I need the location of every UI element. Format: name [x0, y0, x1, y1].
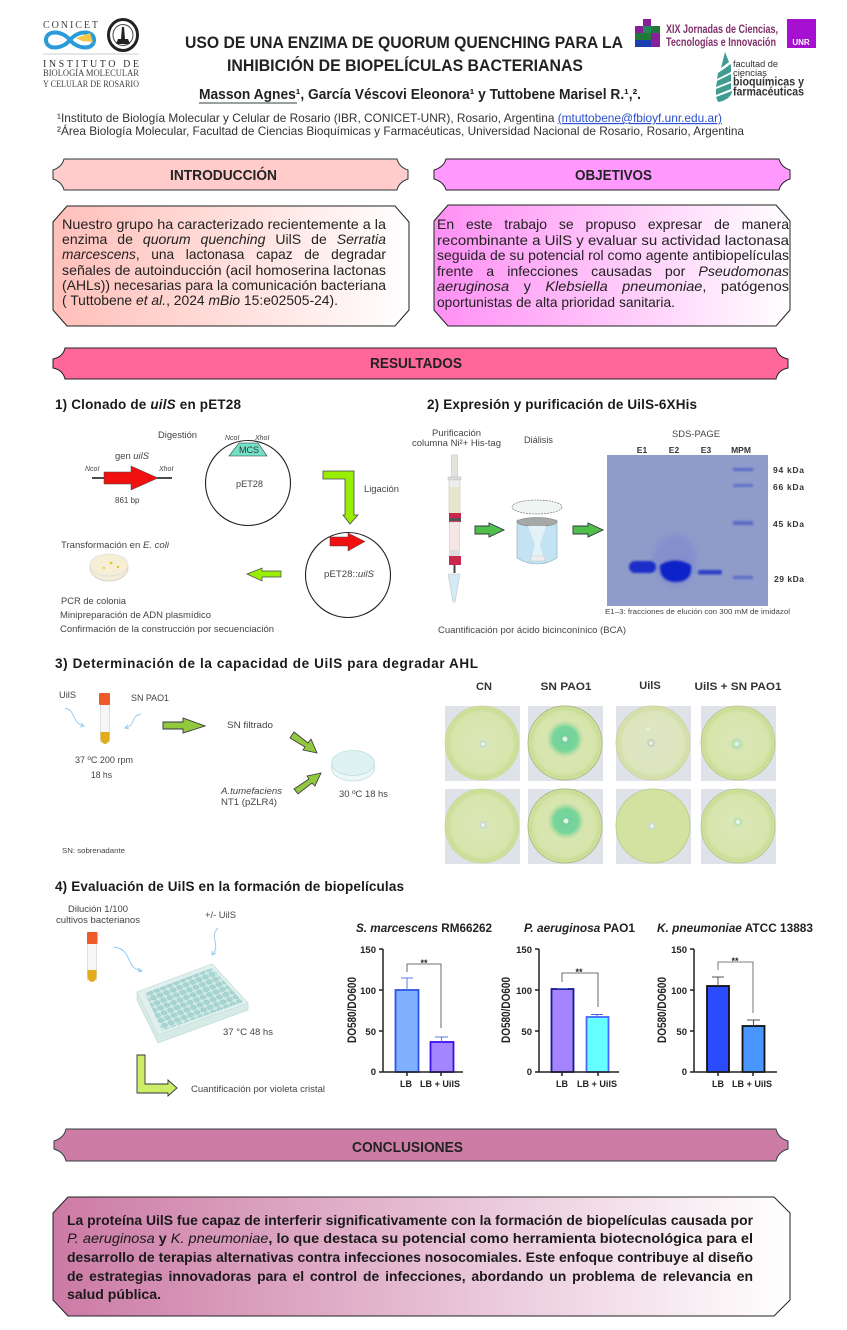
arrow: to gel	[573, 523, 603, 537]
panel: objetivos: oportunistas de alta prioridad sanitaria.	[437, 294, 675, 310]
arrow: ligación	[323, 471, 358, 524]
icon: syringe column	[448, 455, 461, 602]
logo: Facultad de Ciencias Bioquímicas y Farmacéuticas: facultad de	[733, 59, 778, 69]
bar chart: K. pneumoniae: 100	[671, 986, 687, 997]
label: violeta cristal: Cuantificación por violeta cristal	[191, 1084, 325, 1094]
logo: CONICET and Instituto de Biología Molecular: Y CELULAR DE ROSARIO	[43, 79, 139, 89]
gel lane labels: MPM	[731, 445, 751, 455]
heading: Resultados	[53, 348, 788, 379]
bar chart: K. pneumoniae	[657, 921, 813, 1089]
bar chart: K. pneumoniae: K. pneumoniae ATCC 13883	[657, 921, 813, 935]
text: BCA quantification: Cuantificación por ácido bicinconínico (BCA)	[438, 625, 626, 635]
logo: XIX Jornadas and UNR: Tecnologías e Innovación	[666, 37, 776, 49]
authors: Masson Agnes¹, García Véscovi Eleonora¹ y Tuttobene Marisel R.¹,².	[199, 87, 641, 103]
text: incubation: 37 ºC 200 rpm	[75, 755, 133, 765]
title	[185, 34, 623, 75]
heading: Conclusiones	[54, 1129, 788, 1161]
arrow: to filtrate	[163, 718, 205, 733]
gel molecular weight labels	[773, 465, 804, 584]
bar chart: K. pneumoniae: 50	[676, 1027, 687, 1038]
gel lane labels	[637, 445, 751, 455]
plate column headers	[476, 680, 782, 693]
panel: conclusiones: P. aeruginosa y K. pneumoniae, lo que destaca su potencial como herramienta biotecnológica para el	[67, 1230, 753, 1246]
icon: culture tube	[99, 693, 110, 744]
gel lane labels: E2	[669, 445, 679, 455]
arrow: transformation	[247, 568, 281, 581]
plasmid pET28::uilS: pET28::uilS	[324, 569, 375, 579]
section 4: biopelículas	[55, 879, 813, 1096]
logo: CONICET and Instituto de Biología Molecular: INSTITUTO DE	[43, 59, 139, 70]
bar chart: K. pneumoniae: DO580/DO600	[657, 977, 669, 1043]
logo: Facultad de Ciencias Bioquímicas y Farmacéuticas	[716, 52, 805, 102]
arrow: to dialysis	[475, 523, 504, 537]
label: diálisis: Diálisis	[524, 435, 553, 445]
gel molecular weight labels: 94 kDa	[773, 465, 804, 475]
arrow: quantification	[137, 1055, 177, 1096]
panel: conclusiones: salud pública.	[67, 1286, 161, 1302]
label: digestión: Digestión	[158, 430, 197, 440]
arrow: tube to plate	[114, 947, 142, 972]
heading: section 1: 1) Clonado de uilS en pET28	[55, 397, 241, 412]
heading: Objetivos	[434, 159, 790, 190]
icon: culture tube	[87, 932, 98, 982]
section 3: degradación de AHL	[55, 656, 782, 864]
bar chart: S. marcescens: 150	[360, 945, 376, 956]
panel: objetivos: En este trabajo se propuso expresar de manera	[437, 216, 789, 232]
section 1: clonado	[55, 397, 399, 634]
plasmid pET28	[206, 435, 290, 526]
logo: CONICET and Instituto de Biología Molecular: CONICET	[43, 20, 98, 31]
gel caption: E1–3: fracciones de elución con 300 mM de imidazol	[605, 607, 790, 616]
plasmid pET28: NcoI	[225, 435, 239, 442]
bar chart: K. pneumoniae: LB	[712, 1079, 724, 1089]
bar chart: P. aeruginosa: LB + UilS	[577, 1079, 617, 1089]
bar chart: S. marcescens: DO580/DO600	[347, 977, 359, 1043]
arrows: additions to tube	[65, 708, 141, 729]
plasmid pET28: MCS	[239, 445, 259, 456]
bar chart: K. pneumoniae: 0	[682, 1067, 687, 1078]
heading: Objetivos: OBJETIVOS	[575, 168, 652, 184]
plate column headers: SN PAO1	[540, 681, 592, 693]
bar chart: S. marcescens: S. marcescens RM66262	[356, 921, 492, 935]
logo: Facultad de Ciencias Bioquímicas y Farmacéuticas: farmacéuticas	[733, 86, 804, 98]
text: incubation: 18 hs	[91, 770, 112, 780]
bar chart: K. pneumoniae: 150	[671, 945, 687, 956]
gel lane labels: E3	[701, 445, 711, 455]
logo: Facultad de Ciencias Bioquímicas y Farmacéuticas: ciencias	[733, 68, 768, 78]
gene uilS diagram: 861 bp	[115, 496, 140, 505]
SDS-PAGE gel	[607, 455, 768, 606]
bar chart: S. marcescens: LB + UilS	[420, 1079, 460, 1089]
gene uilS diagram: NcoI	[85, 466, 99, 473]
gene uilS diagram: XhoI	[158, 466, 173, 473]
panel: objetivos: seguida de su potencial rol como agente antibiopelículas	[437, 247, 789, 263]
label: biosensor strain	[220, 786, 282, 807]
label: biosensor strain: NT1 (pZLR4)	[221, 797, 277, 807]
panel: introducción: enzima de quorum quenching UilS de Serratia	[62, 231, 386, 247]
bar chart: P. aeruginosa: 100	[516, 986, 532, 997]
plate column headers: CN	[476, 681, 492, 693]
label: ligación: Ligación	[364, 484, 399, 494]
label: transformación: Transformación en E. coli	[61, 540, 170, 550]
bar chart: P. aeruginosa: 50	[521, 1027, 532, 1038]
logo: CONICET and Instituto de Biología Molecular	[43, 20, 139, 89]
bar chart: S. marcescens: 0	[371, 1067, 376, 1078]
label: purificación: columna Ni²+ His-tag	[412, 438, 501, 448]
text: screening steps: Minipreparación de ADN plasmídico	[60, 610, 211, 620]
panel: introducción	[53, 206, 409, 326]
bar chart: P. aeruginosa: LB	[556, 1079, 568, 1089]
icon: petri dish with colonies	[90, 554, 128, 581]
panel: introducción: señales de autoinducción (acil homoserina lactonas	[62, 262, 386, 278]
plate column headers: UilS	[639, 680, 661, 692]
text: screening steps	[60, 596, 274, 634]
bar chart: P. aeruginosa: **	[575, 967, 583, 977]
section 2: expresión y purificación	[412, 397, 804, 635]
panel: objetivos	[434, 205, 790, 326]
label: purificación: Purificación	[432, 428, 481, 438]
label: SN filtrado: SN filtrado	[227, 720, 273, 730]
heading: section 2: 2) Expresión y purificación de UilS-6XHis	[427, 397, 697, 412]
panel: introducción: marcescens, una lactonasa capaz de degradar	[62, 246, 386, 262]
panel: introducción: (AHLs)) necesarias para la comunicación bacteriana	[62, 277, 386, 293]
bar chart: P. aeruginosa	[501, 921, 635, 1089]
label: SDS-PAGE: SDS-PAGE	[672, 429, 720, 439]
bar chart: S. marcescens: LB	[400, 1079, 412, 1089]
affiliations	[57, 111, 744, 138]
gel molecular weight labels: 66 kDa	[773, 482, 804, 492]
bar chart: P. aeruginosa: DO580/DO600	[501, 977, 513, 1043]
text: screening steps: PCR de colonia	[61, 596, 127, 606]
panel: conclusiones: La proteína UilS fue capaz de interferir significativamente con la formación de biopelículas causada por	[67, 1212, 754, 1228]
bar chart: S. marcescens: **	[420, 958, 428, 968]
affiliations: ²Área Biología Molecular, Facultad de Ciencias Bioquímicas y Farmacéuticas, Universidad Nacional de Rosario, Rosario, Argentina	[57, 123, 744, 138]
heading: section 3: 3) Determinación de la capacidad de UilS para degradar AHL	[55, 656, 478, 671]
logo: CONICET and Instituto de Biología Molecular: BIOLOGÍA MOLECULAR	[43, 68, 139, 78]
bar chart: P. aeruginosa: 150	[516, 945, 532, 956]
arrow: UilS to plate	[212, 928, 218, 955]
title: USO DE UNA ENZIMA DE QUORUM QUENCHING PARA LA	[185, 34, 623, 52]
affiliations: ¹Instituto de Biología Molecular y Celular de Rosario (IBR, CONICET-UNR), Rosario, Argentina (mtuttobene@fbioyf.unr.edu.ar)	[57, 111, 722, 125]
bar chart: S. marcescens: 50	[365, 1027, 376, 1038]
logo: XIX Jornadas and UNR: UNR	[792, 38, 810, 47]
panel: objetivos: recombinante a UilS y evaluar su actividad lactonasa	[437, 232, 789, 248]
logo: XIX Jornadas and UNR: XIX Jornadas de Ciencias,	[666, 24, 778, 36]
label: dilution: Dilución 1/100	[68, 904, 128, 914]
label: incubation: 37 °C 48 hs	[223, 1027, 273, 1037]
plates: bioassay photos	[445, 706, 776, 864]
label: purificación	[412, 428, 501, 448]
panel: introducción: ( Tuttobene et al., 2024 mBio 15:e02505-24).	[62, 292, 338, 308]
icon: petri dish	[332, 750, 374, 781]
footnote: SN: SN: sobrenadante	[62, 846, 125, 855]
panel: introducción: Nuestro grupo ha caracterizado recientemente a la	[62, 216, 386, 232]
heading: Introducción	[53, 159, 408, 190]
label: incubation plate: 30 ºC 18 hs	[339, 789, 388, 799]
label: biosensor strain: A.tumefaciens	[220, 786, 282, 796]
text: screening steps: Confirmación de la construcción por secuenciación	[60, 624, 274, 634]
bar chart: P. aeruginosa: 0	[527, 1067, 532, 1078]
gel molecular weight labels: 45 kDa	[773, 519, 804, 529]
labels: tube inputs	[59, 690, 169, 703]
gene uilS diagram	[85, 451, 173, 505]
logo: Facultad de Ciencias Bioquímicas y Farmacéuticas: bioquímicas y	[733, 76, 805, 88]
heading: Resultados: RESULTADOS	[370, 356, 462, 372]
panel: conclusiones: desarrollo de terapias alternativas contra infecciones nosocomiales. Este enfoque contribuye al diseño	[67, 1249, 753, 1265]
plasmid pET28::uilS	[306, 532, 390, 618]
labels: tube inputs: UilS	[59, 690, 76, 700]
label: +/- UilS: +/- UilS	[205, 910, 236, 920]
plasmid pET28: XhoI	[254, 435, 269, 442]
heading: Conclusiones: CONCLUSIONES	[352, 1140, 463, 1156]
text: incubation	[75, 755, 133, 780]
logo: XIX Jornadas and UNR	[635, 19, 816, 49]
bar chart: S. marcescens: 100	[360, 986, 376, 997]
bar chart: K. pneumoniae: **	[731, 956, 739, 966]
labels: tube inputs: SN PAO1	[131, 693, 169, 703]
gel lane labels: E1	[637, 445, 647, 455]
bar chart: S. marcescens	[347, 921, 492, 1089]
icon: dialysis beaker	[512, 500, 562, 564]
heading: section 4: 4) Evaluación de UilS en la formación de biopelículas	[55, 879, 404, 894]
panel: conclusiones	[53, 1197, 790, 1316]
plate column headers: UilS + SN PAO1	[694, 681, 782, 693]
gel molecular weight labels: 29 kDa	[774, 574, 804, 584]
title: INHIBICIÓN DE BIOPELÍCULAS BACTERIANAS	[227, 56, 583, 75]
arrow: biosensor to plate	[294, 773, 321, 794]
label: dilution: cultivos bacterianos	[56, 915, 140, 925]
icon: 96-well plate	[137, 964, 248, 1043]
heading: Introducción: INTRODUCCIÓN	[170, 166, 277, 184]
plasmid pET28: pET28	[236, 479, 263, 489]
bar chart: P. aeruginosa: P. aeruginosa PAO1	[524, 921, 635, 935]
panel: objetivos: frente a infecciones causadas por Pseudomonas	[437, 263, 789, 279]
panel: conclusiones: de estrategias innovadoras para el control de infecciones, abordando un problema de relevancia en	[67, 1268, 753, 1284]
arrow: filtrate to plate	[290, 732, 317, 753]
bar chart: K. pneumoniae: LB + UilS	[732, 1079, 772, 1089]
panel: objetivos: aeruginosa y Klebsiella pneumoniae , patógenos	[437, 278, 789, 294]
label: dilution	[56, 904, 140, 925]
gene uilS diagram: gen uilS	[115, 451, 150, 461]
